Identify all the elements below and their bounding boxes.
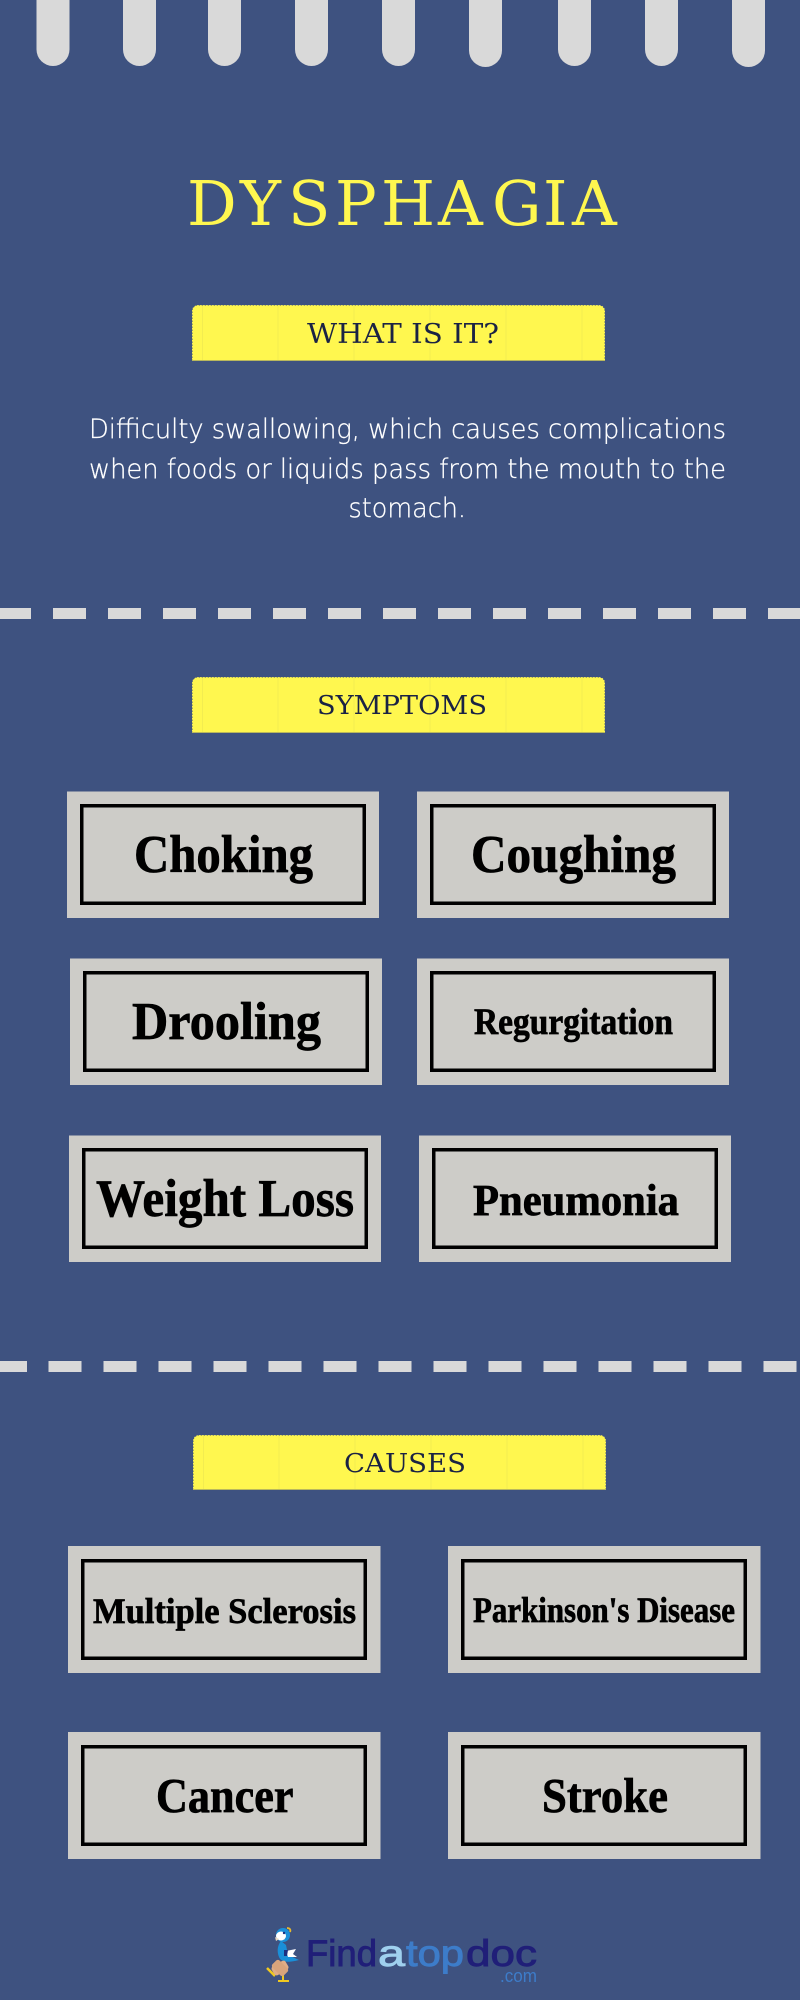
card: drooling: Drooling <box>132 993 321 1051</box>
card: coughing: Coughing <box>471 826 676 884</box>
logo wordmark: top <box>406 1933 464 1974</box>
binder tabs along the top <box>36 0 765 67</box>
dashed divider 1 <box>0 608 800 619</box>
card: regurgitation: Regurgitation <box>474 1002 673 1043</box>
logo wordmark: Find <box>306 1933 377 1974</box>
definition text: Difficulty swallowing, which causes complications <box>89 414 726 445</box>
definition text: stomach. <box>348 493 466 524</box>
card: stroke <box>448 1732 760 1859</box>
definition text: when foods or liquids pass from the mouth to the <box>89 454 726 485</box>
card: cancer: Cancer <box>156 1768 294 1823</box>
card: pneumonia <box>419 1136 731 1262</box>
section header: causes: CAUSES <box>344 1449 466 1479</box>
card: weight loss <box>69 1136 381 1262</box>
card: weight loss: Weight Loss <box>96 1170 354 1228</box>
section header: causes <box>193 1435 606 1490</box>
definition text <box>89 414 726 524</box>
card: choking: Choking <box>134 826 313 884</box>
card: parkinson's disease <box>448 1546 760 1673</box>
section header: symptoms <box>192 677 605 733</box>
card: regurgitation <box>417 958 729 1085</box>
icon: duck mascot <box>267 1928 299 1981</box>
panel: symptoms <box>67 792 731 1262</box>
card: drooling <box>70 958 382 1085</box>
card: stroke: Stroke <box>542 1768 668 1823</box>
logo wordmark: doc <box>466 1933 537 1974</box>
logo wordmark <box>306 1933 537 1986</box>
card: pneumonia: Pneumonia <box>473 1176 679 1225</box>
section header: what is it <box>192 305 605 361</box>
card: coughing <box>417 792 729 918</box>
dashed divider 2 <box>0 1361 796 1372</box>
panel: causes <box>68 1546 760 1859</box>
card: multiple sclerosis: Multiple Sclerosis <box>93 1591 356 1631</box>
logo wordmark: .com <box>500 1966 537 1986</box>
card: choking <box>67 792 379 918</box>
card: multiple sclerosis <box>68 1546 380 1673</box>
title: DYSPHAGIA <box>187 167 618 240</box>
card: cancer <box>68 1732 380 1859</box>
section header: symptoms: SYMPTOMS <box>317 691 487 721</box>
logo: findatopdoc <box>267 1928 537 1986</box>
logo wordmark: a <box>378 1933 406 1974</box>
card: parkinson's disease: Parkinson's Disease <box>473 1590 735 1630</box>
section header: what is it: WHAT IS IT? <box>307 319 499 350</box>
